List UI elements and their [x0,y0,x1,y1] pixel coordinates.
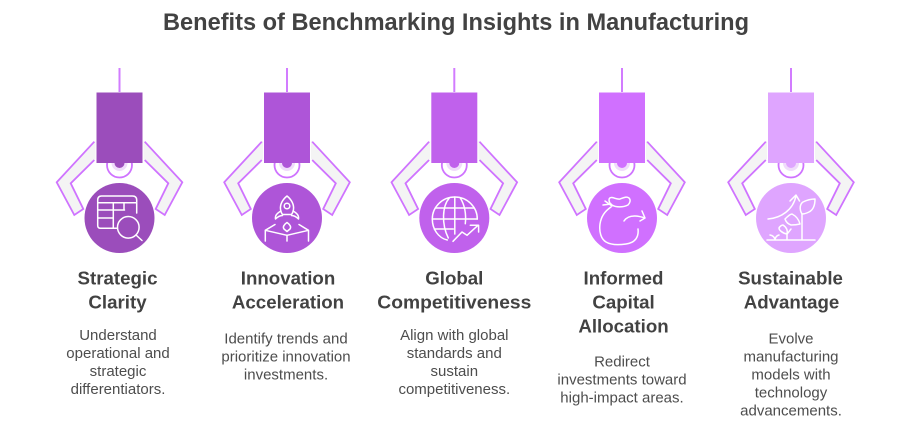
description [66,327,170,398]
icon: rocket [265,196,308,241]
description: high-impact areas. [560,390,684,406]
description: differentiators. [71,381,165,398]
description: standards and [407,345,502,362]
heading [377,268,531,312]
icon: globe with arrow [432,197,479,241]
panel: Informed Capital Allocation [557,68,687,406]
heading: Informed [584,268,663,288]
description: operational and [66,345,170,362]
icon: growing plants [767,195,815,240]
description: technology [755,384,828,402]
description: Understand [79,327,157,344]
description [398,327,510,398]
heading [232,268,344,312]
description: sustain [431,363,478,380]
panel: Global Competitiveness [377,68,531,398]
panel: Sustainable Advantage [728,68,854,420]
heading: Clarity [88,292,147,312]
description: models with [751,366,831,384]
description: Align with global [400,327,509,344]
description: Redirect [594,354,651,370]
title: Benefits of Benchmarking Insights in Manufacturing [163,9,749,36]
panel: Strategic Clarity [57,68,182,398]
heading: Allocation [578,316,669,336]
description [740,330,842,420]
description: investments. [244,366,328,384]
heading [78,268,157,312]
description: Evolve [768,330,814,348]
heading: Acceleration [232,292,344,312]
icon: table with magnifier [98,196,142,240]
description [221,330,351,384]
description: prioritize innovation [221,348,351,366]
description: Identify trends and [224,330,348,348]
description [557,354,687,406]
heading [578,268,669,336]
description: strategic [90,363,147,380]
heading: Capital [592,292,655,312]
heading: Strategic [78,268,157,288]
heading: Advantage [744,292,839,312]
description: competitiveness. [398,381,510,398]
heading: Innovation [241,268,335,288]
heading [738,268,843,312]
heading: Sustainable [738,268,843,288]
heading: Global [425,268,483,288]
heading: Competitiveness [377,292,531,312]
panel: Innovation Acceleration [221,68,351,384]
description: investments toward [557,372,687,388]
description: advancements. [740,402,842,420]
icon: money bag with arrow [600,197,645,245]
description: manufacturing [743,348,839,366]
